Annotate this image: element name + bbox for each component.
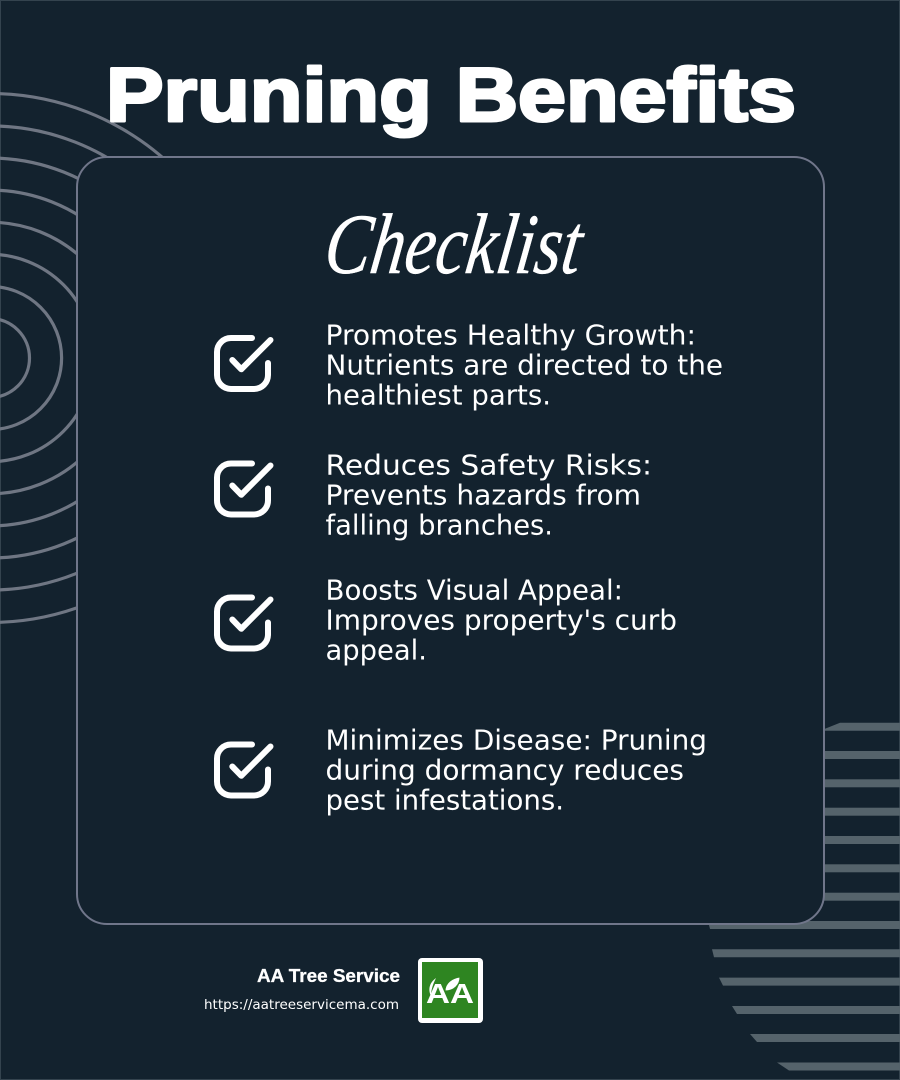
panel: checklist [77,157,824,924]
icon: checkbox 4 [217,744,270,796]
icon: checkbox 3 [217,598,270,648]
text: item 3: appeal. [326,634,427,666]
text: item 2 [326,448,652,542]
footer: company name: AA Tree Service [257,966,400,986]
text: item 1: healthiest parts. [326,378,551,412]
text: item 1: Nutrients are directed to the [326,348,723,382]
icon: checkbox 2 [217,464,270,514]
text: item 2: Prevents hazards from [326,478,641,512]
text: item 1 [326,318,723,412]
text: item 2: Reduces Safety Risks: [326,448,652,482]
icon: company logo [418,958,483,1023]
footer: website url: https://aatreeservicema.com [204,997,399,1013]
text: item 3: Boosts Visual Appeal: [326,574,623,606]
decorative striped circle [708,723,900,1070]
icon: company logo: AA [426,978,474,1009]
text: item 4 [326,724,707,816]
text: item 4: Minimizes Disease: Pruning [326,724,707,756]
icon: checkbox 1 [217,338,270,389]
text: item 3: Improves property's curb [326,604,677,636]
text: item 1: Promotes Healthy Growth: [326,318,696,352]
text: item 2: falling branches. [326,508,553,542]
text: item 4: during dormancy reduces [326,754,684,786]
text: item 3 [326,574,677,666]
decorative concentric rings [0,94,254,622]
text: item 4: pest infestations. [326,784,564,816]
heading: Checklist: Checklist [319,196,590,292]
title: Pruning Benefits [106,53,796,138]
